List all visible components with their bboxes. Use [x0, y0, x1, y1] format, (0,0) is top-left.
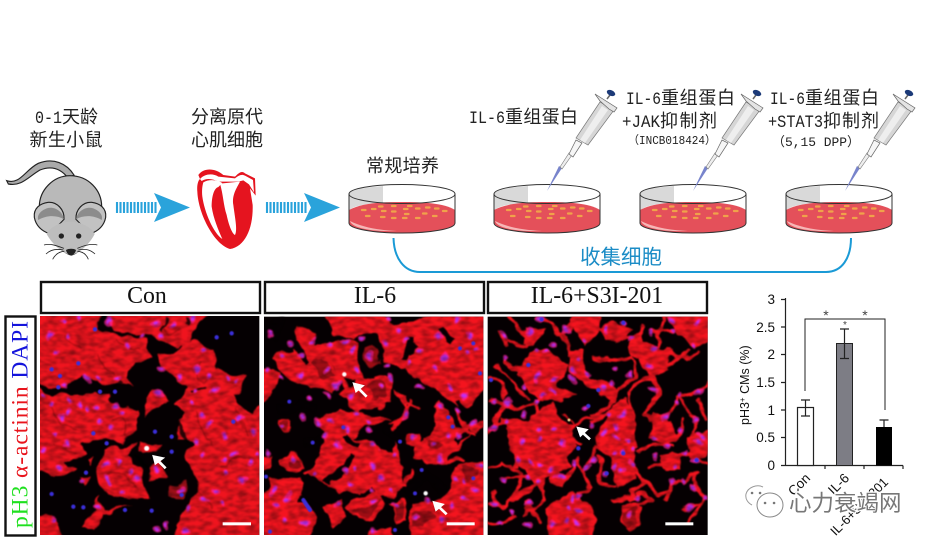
bracket: collect cells — [394, 238, 851, 272]
label: newborn mouse: 新生小鼠 — [30, 126, 102, 152]
header: Con — [41, 282, 260, 313]
x tick labels: IL-6+S3I-201 — [827, 475, 891, 539]
icon: heart section — [197, 169, 256, 249]
significance stars: * — [823, 307, 829, 323]
y tick labels: 3 — [767, 292, 775, 307]
y tick labels: 0.5 — [756, 430, 775, 445]
x tick labels: Con — [785, 471, 813, 499]
error bars — [801, 329, 888, 427]
header: Con: Con — [127, 283, 167, 309]
scale bar — [223, 522, 251, 525]
label: IL-6 plus JAK inhibitor — [622, 84, 735, 148]
dish: IL-6 STAT3 inhibitor — [786, 184, 892, 233]
bar: IL-6 — [836, 344, 852, 466]
y tick labels: 1 — [767, 403, 775, 418]
header: IL-6: IL-6 — [354, 283, 396, 309]
label: routine culture: 常规培养 — [366, 152, 439, 178]
side label: stain legend: pH3 α-actinin DAPI — [8, 321, 34, 528]
icon: pipette 2 — [693, 89, 763, 191]
label: IL-6 plus STAT3 inhibitor: 重组蛋白 — [805, 84, 879, 110]
y axis title: + — [738, 397, 747, 402]
label: IL-6 recombinant protein — [469, 103, 578, 129]
label: IL-6 recombinant protein: 重组蛋白 — [505, 103, 578, 129]
label: IL-6 plus JAK inhibitor: （INCB018424） — [628, 134, 716, 148]
x tick labels: IL-6 — [825, 471, 852, 498]
y tick labels: 2 — [767, 347, 775, 362]
panel: IL-6+S3I-201 micrograph — [488, 312, 713, 540]
panel: Con micrograph — [33, 310, 263, 540]
axes — [781, 298, 903, 469]
label: newborn mouse — [30, 103, 102, 152]
label: IL-6 plus STAT3 inhibitor: 抑制剂 — [823, 107, 879, 133]
icon: pipette 3 — [845, 89, 915, 191]
label: collect cells: 收集细胞 — [580, 240, 662, 270]
bar: IL-6+S3I-201 — [876, 427, 892, 466]
dish: IL-6 JAK inhibitor — [640, 184, 746, 233]
icon: white arrow bottom — [434, 503, 447, 514]
header: IL-6+S3I-201 — [488, 282, 707, 313]
y tick labels — [756, 292, 775, 473]
label: IL-6 plus STAT3 inhibitor — [768, 84, 879, 150]
label: newborn mouse: 0-1 — [35, 109, 62, 129]
arrow: heart to dish — [267, 193, 340, 222]
icon: white arrow — [154, 457, 166, 468]
significance bracket — [805, 319, 885, 410]
label: IL-6 plus STAT3 inhibitor: IL-6 — [770, 90, 805, 110]
label: IL-6 plus JAK inhibitor: 抑制剂 — [660, 107, 717, 133]
significance stars — [823, 307, 868, 331]
y tick labels: 0 — [767, 458, 775, 473]
x tick labels — [785, 471, 891, 539]
label: isolate cardiomyocytes: 心肌细胞 — [191, 126, 263, 152]
icon: white arrow top — [354, 384, 367, 397]
header: IL-6 — [265, 282, 484, 313]
bar: Con — [798, 408, 814, 466]
label: newborn mouse: 天龄 — [62, 103, 98, 129]
bar chart: pH3+ CMs — [738, 292, 903, 539]
y tick labels: 2.5 — [756, 320, 775, 335]
label: IL-6 plus JAK inhibitor: IL-6 — [626, 90, 661, 110]
significance stars: * — [843, 320, 847, 331]
label: IL-6 plus JAK inhibitor: +JAK — [622, 113, 660, 133]
icon: pipette 1 — [547, 89, 617, 191]
label: IL-6 plus JAK inhibitor: 重组蛋白 — [661, 84, 735, 110]
dish: IL-6 — [494, 184, 600, 233]
label: IL-6 plus STAT3 inhibitor: +STAT3 — [768, 113, 823, 133]
label: isolate cardiomyocytes: 分离原代 — [191, 103, 263, 129]
scale bar — [447, 522, 475, 525]
icon: white arrow — [578, 428, 590, 439]
watermark: WeChat icon and site name: 心力衰竭网 — [789, 486, 902, 518]
y axis title: pH3 — [738, 402, 752, 425]
y axis title: CMs (%) — [738, 345, 752, 397]
scale bar — [665, 522, 693, 525]
arrow: mouse to heart — [117, 193, 190, 222]
label: IL-6 plus STAT3 inhibitor: （5,15 DPP） — [772, 135, 860, 150]
panel: IL-6 micrograph — [260, 310, 490, 540]
header: IL-6+S3I-201: IL-6+S3I-201 — [531, 283, 663, 309]
dish: routine culture — [349, 184, 455, 233]
y tick labels: 1.5 — [756, 375, 775, 390]
significance stars: * — [862, 307, 868, 323]
icon: mouse — [7, 161, 106, 259]
label: IL-6 recombinant protein: IL-6 — [469, 109, 505, 129]
